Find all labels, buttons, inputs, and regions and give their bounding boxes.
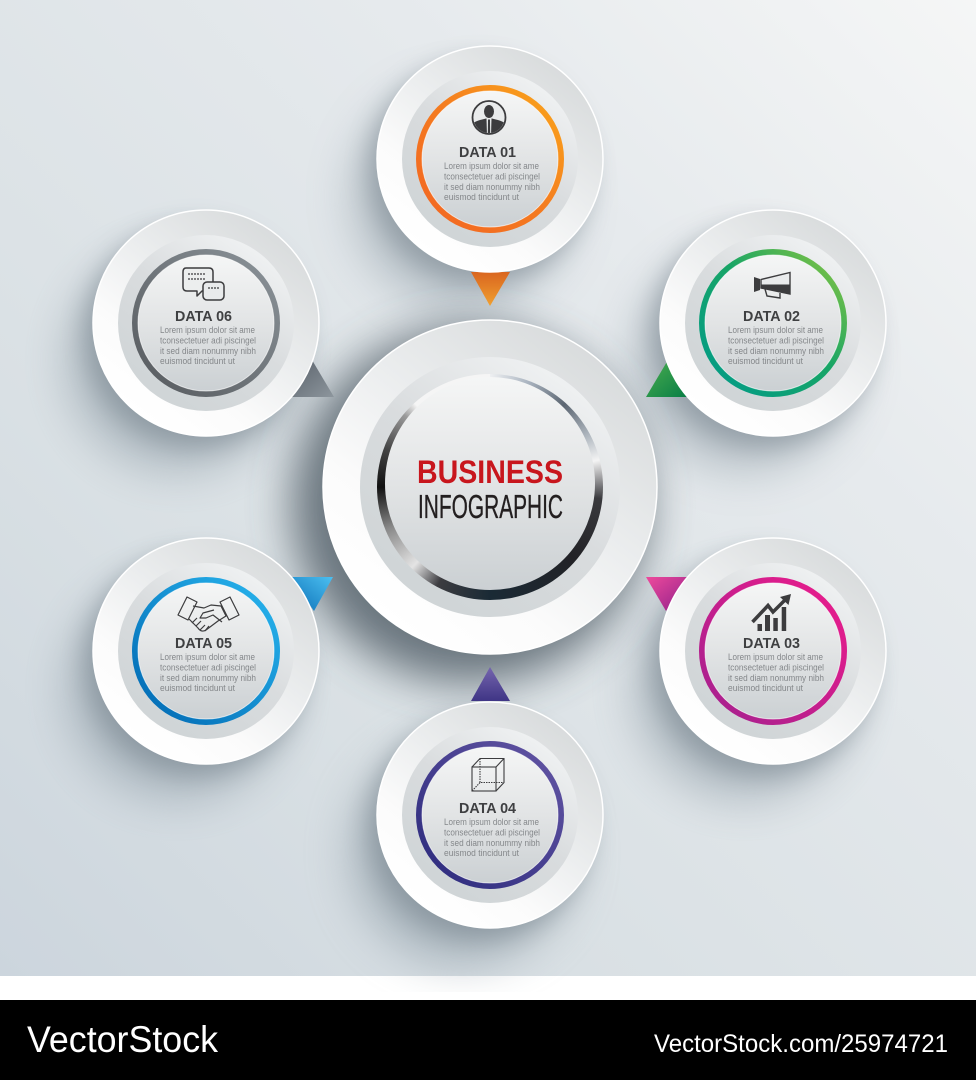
text block: it sed diam nonummy nibh bbox=[444, 838, 540, 848]
icon: megaphone bbox=[754, 272, 790, 298]
text block: tconsectetuer adi piscingel bbox=[160, 336, 256, 346]
heading: DATA 02 bbox=[743, 309, 800, 325]
text block: it sed diam nonummy nibh bbox=[444, 182, 540, 192]
heading: DATA 04 bbox=[459, 801, 516, 817]
icon: cube bbox=[472, 758, 504, 791]
pointer triangle: data 02 bbox=[646, 360, 690, 397]
pointer triangle: data 05 bbox=[290, 577, 333, 611]
watermark logo: VectorStock bbox=[27, 1019, 218, 1060]
text block: tconsectetuer adi piscingel bbox=[728, 662, 824, 672]
text block: tconsectetuer adi piscingel bbox=[160, 662, 256, 672]
heading: DATA 05 bbox=[175, 636, 232, 652]
pointer triangle: data 03 bbox=[646, 577, 690, 611]
text block: tconsectetuer adi piscingel bbox=[444, 172, 540, 182]
text block bbox=[444, 161, 540, 202]
text block: euismod tincidunt ut bbox=[728, 683, 804, 693]
text block: euismod tincidunt ut bbox=[160, 683, 236, 693]
text block: tconsectetuer adi piscingel bbox=[728, 336, 824, 346]
text block: Lorem ipsum dolor sit ame bbox=[728, 652, 823, 662]
panel: data 02 bbox=[660, 210, 886, 436]
panel: data 05 bbox=[93, 538, 319, 764]
text block bbox=[160, 652, 256, 693]
soft drop shadows bbox=[66, 59, 875, 964]
watermark url: VectorStock.com/25974721 bbox=[654, 1030, 948, 1058]
icon: businessman bbox=[471, 101, 507, 136]
title: BUSINESS bbox=[417, 454, 563, 490]
title: INFOGRAPHIC bbox=[418, 488, 563, 525]
text block: euismod tincidunt ut bbox=[728, 356, 804, 366]
text block: tconsectetuer adi piscingel bbox=[444, 828, 540, 838]
text block: it sed diam nonummy nibh bbox=[728, 673, 824, 683]
text block: euismod tincidunt ut bbox=[444, 848, 520, 858]
text block bbox=[728, 652, 824, 693]
text block: euismod tincidunt ut bbox=[160, 356, 236, 366]
title bbox=[417, 454, 563, 525]
heading: DATA 01 bbox=[459, 145, 516, 161]
pointer triangle: data 04 bbox=[471, 667, 510, 701]
pointer triangle: data 01 bbox=[471, 272, 510, 306]
heading: DATA 03 bbox=[743, 636, 800, 652]
text block bbox=[444, 817, 540, 858]
text block: Lorem ipsum dolor sit ame bbox=[444, 161, 539, 171]
icon: chat bubbles bbox=[183, 268, 224, 300]
text block: Lorem ipsum dolor sit ame bbox=[728, 325, 823, 335]
text block bbox=[728, 325, 824, 366]
panel: data 03 bbox=[660, 538, 886, 764]
text block: Lorem ipsum dolor sit ame bbox=[444, 817, 539, 827]
text block: it sed diam nonummy nibh bbox=[728, 346, 824, 356]
text block: euismod tincidunt ut bbox=[444, 192, 520, 202]
pointer triangle: data 06 bbox=[290, 360, 334, 397]
footer watermark bar bbox=[0, 1000, 976, 1080]
heading: DATA 06 bbox=[175, 309, 232, 325]
icon: handshake bbox=[178, 597, 239, 631]
panel: data 01 bbox=[377, 46, 603, 272]
text block: it sed diam nonummy nibh bbox=[160, 346, 256, 356]
text block: Lorem ipsum dolor sit ame bbox=[160, 325, 255, 335]
text block: Lorem ipsum dolor sit ame bbox=[160, 652, 255, 662]
text block: it sed diam nonummy nibh bbox=[160, 673, 256, 683]
panel: central business infographic disc bbox=[323, 320, 657, 654]
icon: growth chart bbox=[752, 594, 791, 631]
text block bbox=[160, 325, 256, 366]
panel: data 06 bbox=[93, 210, 319, 436]
panel: data 04 bbox=[377, 702, 603, 928]
